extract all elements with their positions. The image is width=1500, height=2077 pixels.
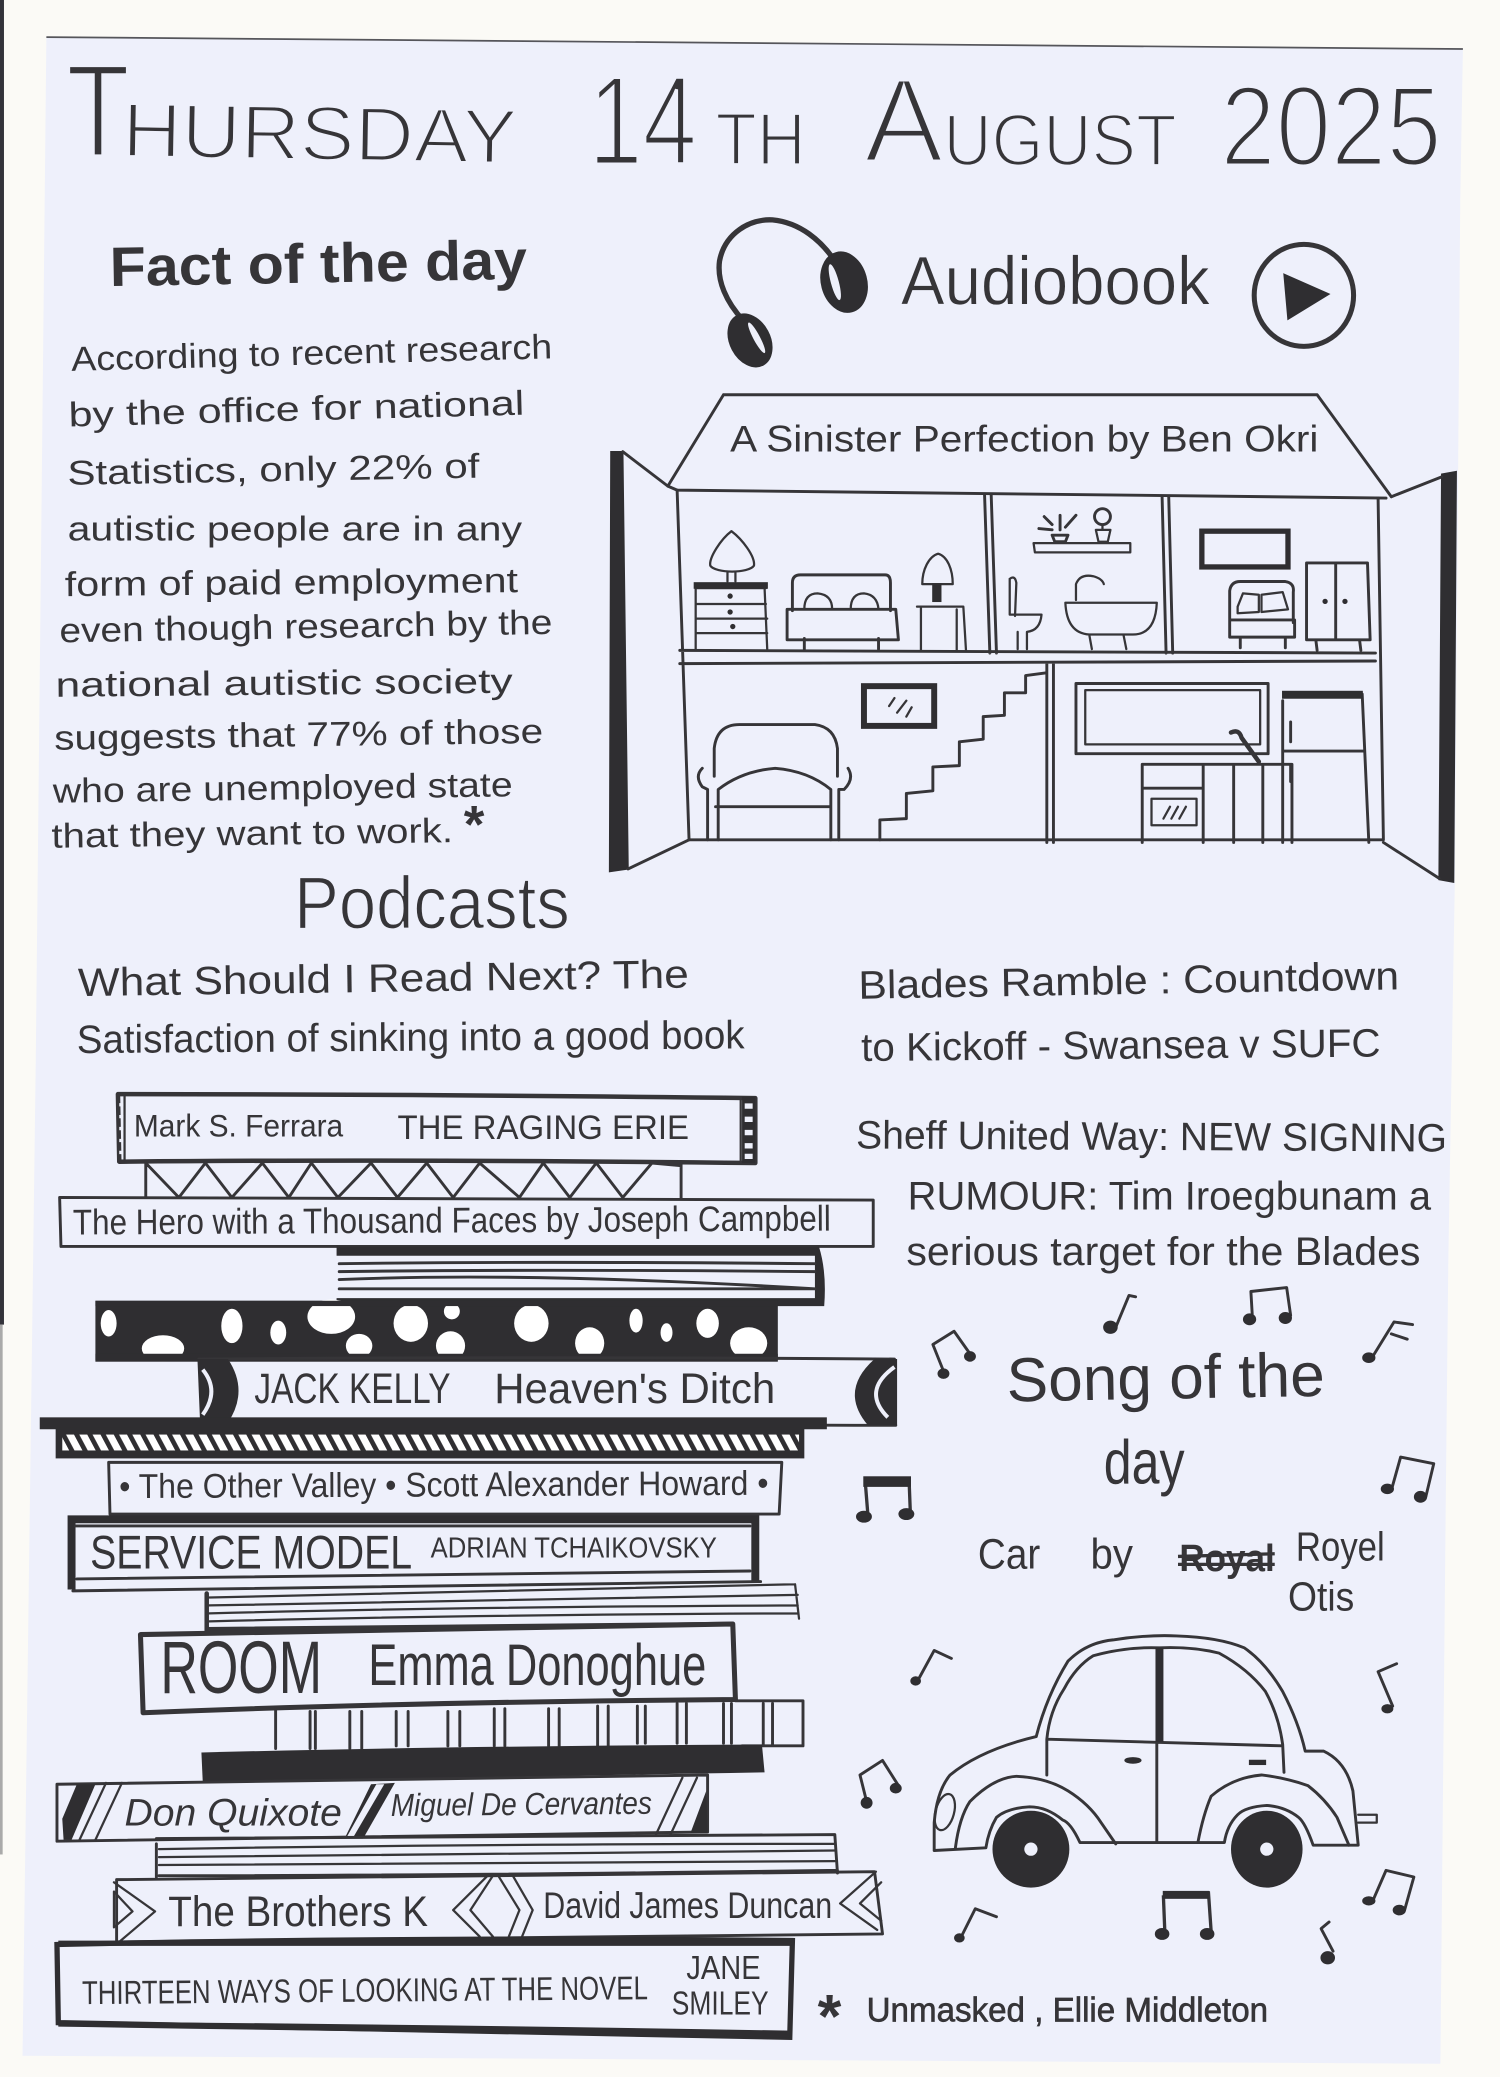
- text block: song credit: [978, 1523, 1385, 1620]
- heading: fact of the day: Fact of the day: [109, 229, 528, 298]
- book: jack kelly heavens ditch: [197, 1358, 897, 1425]
- text block: fact body: [51, 328, 553, 856]
- book: the brothers k: The Brothers K: [168, 1888, 428, 1935]
- panel: podcast blades ramble: [858, 954, 1399, 1070]
- text block: fact body: that they want to work.: [51, 812, 453, 856]
- book: room: ROOM: [160, 1626, 322, 1709]
- heading: song of the day: Song of the: [1006, 1341, 1325, 1415]
- book: the raging erie: Mark S. Ferrara: [134, 1108, 344, 1144]
- roof: [668, 395, 1391, 498]
- roof: A Sinister Perfection by Ben Okri: [730, 418, 1318, 460]
- text block: source credit: [818, 1982, 1268, 2050]
- chart: dolls house illustration: [610, 395, 1456, 882]
- text block: fact body: who are unemployed state: [51, 766, 513, 811]
- text block: fact body: national autistic society: [55, 663, 514, 705]
- book: polka dots: [95, 1299, 778, 1362]
- title: UGUST: [943, 101, 1177, 182]
- bathroom furniture: [1010, 509, 1157, 649]
- text block: fact body: form of paid employment: [65, 562, 519, 604]
- title: A: [864, 55, 944, 188]
- book: thirteen ways of looking at the novel: [57, 1939, 792, 2037]
- book: thirteen ways of looking at the novel: JANE: [686, 1950, 761, 1987]
- title: 2025: [1220, 64, 1442, 191]
- book: vertical stripes: [276, 1701, 803, 1748]
- book: don quixote: [57, 1775, 708, 1841]
- chart: stack of books: [40, 1094, 897, 2037]
- title: HURSDAY: [122, 87, 518, 180]
- text block: fact body: autistic people are in any: [68, 510, 523, 548]
- book: lined pages: [337, 1246, 825, 1306]
- kitchen: [1076, 684, 1369, 842]
- book: jack kelly heavens ditch: JACK KELLY: [254, 1365, 451, 1412]
- text block: song credit: Car: [978, 1530, 1040, 1577]
- book: lined pages three: [156, 1835, 837, 1877]
- book: zigzag: [146, 1163, 681, 1199]
- text block: fact body: suggests that 77% of those: [54, 713, 543, 758]
- panel: podcast sheff united way: [856, 1113, 1447, 1274]
- panel: podcast sheff united way: serious target for the Blades: [906, 1230, 1420, 1274]
- text block: source credit: Unmasked , Ellie Middleton: [867, 1991, 1268, 2029]
- book: jack kelly heavens ditch: Heaven's Ditch: [494, 1365, 775, 1412]
- text block: source credit: *: [818, 1982, 842, 2050]
- bedroom furniture: [694, 531, 966, 650]
- book: room: [140, 1624, 735, 1713]
- panel: audiobook: [610, 220, 1456, 882]
- text block: fact body: by the office for national: [68, 385, 525, 435]
- panel: podcast blades ramble: to Kickoff - Swansea v SUFC: [861, 1021, 1381, 1070]
- book: the raging erie: THE RAGING ERIE: [398, 1109, 689, 1147]
- book: room: Emma Donoghue: [368, 1633, 706, 1698]
- heading: song of the day: [1006, 1341, 1325, 1498]
- right door: [1383, 472, 1456, 882]
- book: service model: SERVICE MODEL: [90, 1526, 412, 1579]
- text block: fact body: According to recent research: [71, 328, 553, 379]
- book: the other valley: • The Other Valley • Scott Alexander Howard •: [119, 1465, 769, 1506]
- lower floor living room: [698, 673, 1045, 840]
- title: 14: [588, 49, 697, 191]
- book: the hero with a thousand faces: The Hero with a Thousand Faces by Joseph Campbell: [73, 1199, 831, 1243]
- book: thirteen ways of looking at the novel: THIRTEEN WAYS OF LOOKING AT THE NOVEL: [82, 1970, 648, 2012]
- title: T: [66, 37, 130, 185]
- text block: fact body: Statistics, only 22% of: [67, 448, 480, 493]
- book: service model: ADRIAN TCHAIKOVSKY: [431, 1533, 717, 1565]
- text block: song credit: Otis: [1288, 1574, 1354, 1620]
- text block: song credit: by: [1091, 1530, 1134, 1577]
- left door: [610, 452, 689, 872]
- text block: fact body: *: [464, 795, 485, 854]
- title: TH: [716, 97, 806, 180]
- panel: song of the day: [857, 1288, 1434, 1964]
- book: hatched: [56, 1428, 804, 1458]
- panel: podcast sheff united way: RUMOUR: Tim Iroegbunam a: [908, 1174, 1432, 1218]
- panel: fact of the day: [51, 229, 553, 856]
- heading: song of the day: day: [1104, 1429, 1185, 1498]
- book: the raging erie: [118, 1094, 755, 1163]
- text block: song credit: Royal: [1179, 1537, 1275, 1580]
- panel: podcast what should i read next: [77, 953, 745, 1062]
- text block: song credit: Royel: [1296, 1523, 1385, 1569]
- book: don quixote: Don Quixote: [125, 1791, 342, 1834]
- book: the brothers k: David James Duncan: [543, 1884, 832, 1926]
- book: service model: [72, 1519, 761, 1591]
- heading: audiobook: Audiobook: [901, 243, 1210, 320]
- book: thin dark: [40, 1417, 827, 1429]
- house frame: [677, 490, 1383, 842]
- panel: podcast blades ramble: Blades Ramble : Countdown: [858, 954, 1399, 1008]
- icon: play button: [1254, 244, 1354, 346]
- book: thirteen ways of looking at the novel: SMILEY: [672, 1986, 769, 2023]
- panel: podcast what should i read next: Satisfaction of sinking into a good book: [77, 1013, 745, 1062]
- title: [66, 37, 1442, 191]
- icon: car: [931, 1636, 1377, 1888]
- book: the brothers k: [114, 1872, 883, 1942]
- heading: podcasts: Podcasts: [294, 862, 570, 945]
- icon: headphones: [719, 220, 874, 374]
- panel: podcast what should i read next: What Should I Read Next? The: [78, 953, 689, 1005]
- second bedroom furniture: [1202, 531, 1370, 650]
- book: don quixote: Miguel De Cervantes: [391, 1785, 652, 1823]
- book: lined pages two: [207, 1584, 799, 1631]
- book: solid dark: [201, 1745, 765, 1782]
- panel: podcast sheff united way: Sheff United Way: NEW SIGNING: [856, 1113, 1447, 1161]
- text block: fact body: even though research by the: [59, 604, 553, 650]
- icon: music notes: [857, 1288, 1434, 1964]
